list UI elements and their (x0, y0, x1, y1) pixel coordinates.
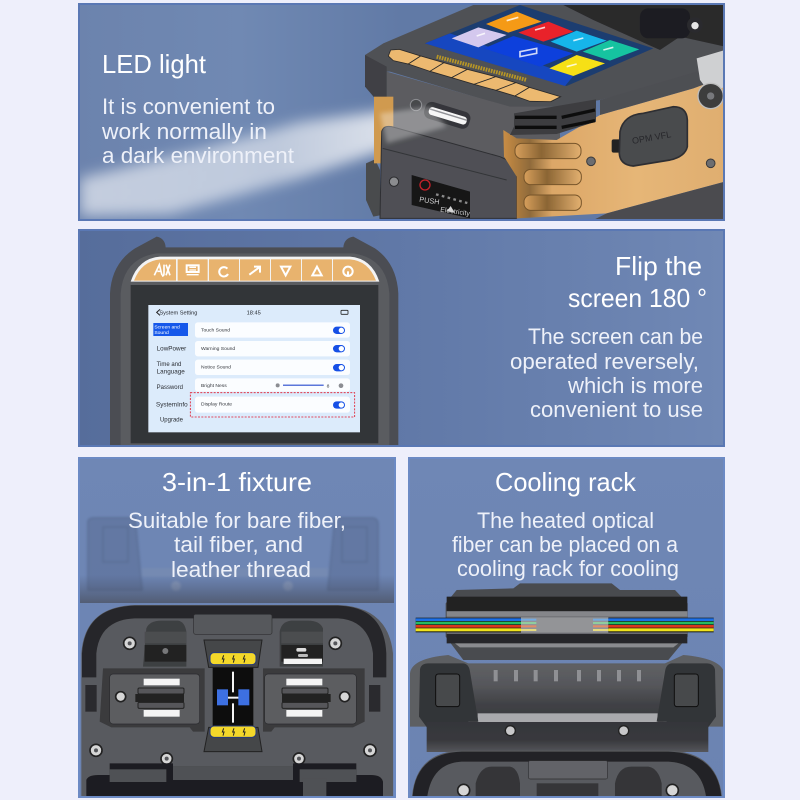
screen tile red (518, 22, 573, 42)
panel crease (383, 148, 507, 180)
housing (81, 605, 393, 800)
panel background (78, 229, 725, 447)
heading: flip the screen: Flip the (615, 251, 702, 281)
rack lower band (447, 634, 687, 643)
right hinge block (657, 663, 716, 732)
settings header: System Setting (159, 310, 197, 316)
lower lighter blocks (110, 767, 356, 800)
rack fold line (455, 643, 678, 647)
panel: cooling rack (408, 457, 725, 800)
description: LED light (102, 98, 294, 163)
settings header: 18:45 (247, 311, 261, 317)
hinge roller (640, 8, 703, 38)
description: LED light: It is convenient to (102, 94, 275, 119)
center well (213, 667, 253, 727)
ghost of cooling rack behind text (88, 518, 378, 591)
rack dark band (447, 597, 687, 611)
side rail (600, 74, 704, 115)
dark rim (82, 606, 386, 677)
description: cooling rack: The heated optical (477, 508, 654, 533)
top housing (365, 5, 725, 107)
heading: LED light: LED light (102, 49, 207, 79)
brightness slider: 8 (327, 384, 330, 390)
device: screen front view (110, 237, 398, 450)
LED glow on housing (380, 107, 447, 143)
description: flip the screen: convenient to use (530, 397, 703, 422)
right fiber holder (263, 668, 365, 732)
description: flip the screen: which is more (567, 373, 703, 398)
screws on gold (587, 157, 715, 168)
side latches (85, 685, 380, 712)
colored fibers right (608, 618, 714, 632)
OPM VFL port cover: OPM VFL (631, 129, 672, 146)
toggles (333, 327, 345, 409)
latch (697, 50, 725, 109)
top yellow electrode cover (204, 640, 262, 667)
grip ridges (510, 99, 596, 135)
lower housing (412, 751, 722, 800)
selected menu item (153, 323, 188, 336)
brightness slider (276, 383, 343, 390)
left corner dark (365, 55, 387, 98)
screws (90, 637, 376, 764)
description: flip the screen: The screen can be (528, 324, 703, 349)
row labels (201, 328, 235, 408)
description: flip the screen (510, 324, 703, 422)
panel background (78, 3, 725, 221)
description: cooling rack: cooling rack for cooling (457, 556, 679, 581)
panel border 2 (79, 230, 724, 446)
orange button row (388, 49, 561, 102)
screen tile blue (484, 36, 573, 67)
row labels: Touch Sound (201, 328, 230, 334)
left upper clamp (143, 621, 186, 667)
blue V-grooves (217, 689, 249, 705)
menu items: Upgrade (160, 418, 184, 424)
button bar (134, 259, 376, 281)
selected menu item: Sound (154, 330, 169, 336)
hinge block (563, 5, 725, 50)
lower rail (593, 182, 725, 220)
top center tab (194, 614, 272, 634)
setting rows (195, 322, 350, 413)
right upper clamp (280, 621, 323, 667)
push status label (412, 175, 471, 218)
menu items: LowPower (157, 346, 186, 353)
gold body (503, 77, 725, 218)
heading: flip the screen (568, 251, 707, 313)
row labels: Notice Sound (201, 364, 231, 370)
gold left strip (374, 97, 393, 163)
rack body (470, 665, 663, 722)
rack light band (447, 611, 687, 617)
screen bezel (131, 285, 378, 443)
selected menu item: Screen and (154, 325, 180, 331)
screw centers (94, 641, 372, 761)
colored fibers left (416, 618, 521, 632)
display (148, 305, 360, 432)
screen tile orange (486, 12, 542, 33)
screen tile lavender (452, 27, 507, 47)
dark band under rack (427, 722, 708, 752)
front grey face (375, 72, 560, 160)
lower screws (458, 784, 678, 796)
rack mid band (447, 617, 687, 634)
heat shrink sleeve (521, 617, 608, 633)
tile glyphs (477, 17, 613, 67)
round sensor (410, 99, 422, 111)
screw (389, 177, 399, 186)
description: 3-in-1 fixture: Suitable for bare fiber, (128, 508, 346, 533)
gold reflection text on glass (437, 57, 527, 80)
rack bright lip (478, 713, 658, 722)
description: cooling rack: fiber can be placed on a (452, 532, 679, 557)
light beam from LED (80, 102, 374, 219)
panel border 4 (409, 458, 724, 797)
screen tile yellow (549, 55, 605, 76)
lower blue status bar (425, 33, 573, 86)
description: 3-in-1 fixture: leather thread (171, 557, 311, 582)
lower dark rim (412, 752, 722, 800)
panel background (78, 457, 396, 798)
gold ribs (515, 143, 581, 210)
toggle knobs (339, 328, 344, 408)
panel border 3 (79, 458, 395, 797)
row labels: Warning Sound (201, 346, 235, 352)
screen bezel (425, 5, 653, 86)
panel: LED light (78, 3, 725, 221)
heading: 3-in-1 fixture: 3-in-1 fixture (162, 467, 312, 497)
fiber sleeve ends (521, 619, 608, 631)
description: LED light: work normally in (101, 119, 267, 144)
panel: flip the screen (78, 229, 725, 450)
device: fixture top view (81, 605, 393, 800)
lower clamps (476, 767, 662, 800)
lower left corner dark (366, 159, 390, 217)
settings header (157, 309, 348, 317)
OPM VFL port cover (612, 107, 687, 166)
push status label: Electricity (440, 207, 471, 218)
description: 3-in-1 fixture: tail fiber, and (174, 532, 303, 557)
LED bezel (424, 102, 470, 129)
device: cooling rack (410, 583, 724, 800)
panel background (408, 457, 725, 798)
rack slots (494, 670, 641, 681)
bottom yellow electrode cover (204, 726, 262, 752)
battery panel (380, 126, 517, 218)
heading: flip the screen: screen 180 ° (568, 283, 707, 313)
screen tile cyan (551, 31, 607, 52)
rack screws (505, 726, 629, 736)
button icons (154, 265, 353, 277)
screen tile teal (583, 40, 639, 61)
panel border 1 (79, 4, 724, 220)
red dashed highlight (190, 393, 355, 417)
push status label: PUSH (419, 195, 440, 206)
description: 3-in-1 fixture (128, 508, 346, 582)
lower dark structure (86, 763, 383, 800)
menu items: Password (157, 385, 183, 391)
rack back plate (446, 583, 688, 660)
button bar white edge (131, 257, 379, 282)
lower center tab (528, 761, 608, 779)
row labels: Bright Ness (201, 383, 227, 389)
description: flip the screen: operated reversely, (510, 349, 699, 374)
left hinge block (419, 663, 478, 732)
menu items: Time and (157, 362, 181, 368)
menu items: Language (157, 369, 185, 376)
outer housing (110, 237, 398, 450)
housing shoulders (410, 655, 724, 727)
fiber guides (226, 672, 240, 723)
description: cooling rack (452, 508, 679, 581)
panel: 3-in-1 fixture (78, 457, 396, 800)
menu items: SystemInfo (156, 402, 188, 409)
heading: cooling rack: Cooling rack (495, 467, 637, 497)
description: LED light: a dark environment (102, 143, 294, 168)
left fiber holder (100, 668, 205, 732)
menu items (156, 346, 188, 424)
row labels: Display Route (201, 402, 232, 408)
ghost shadow above device (80, 575, 394, 603)
device: fusion splicer corner (365, 5, 725, 220)
inner housing (121, 253, 389, 450)
